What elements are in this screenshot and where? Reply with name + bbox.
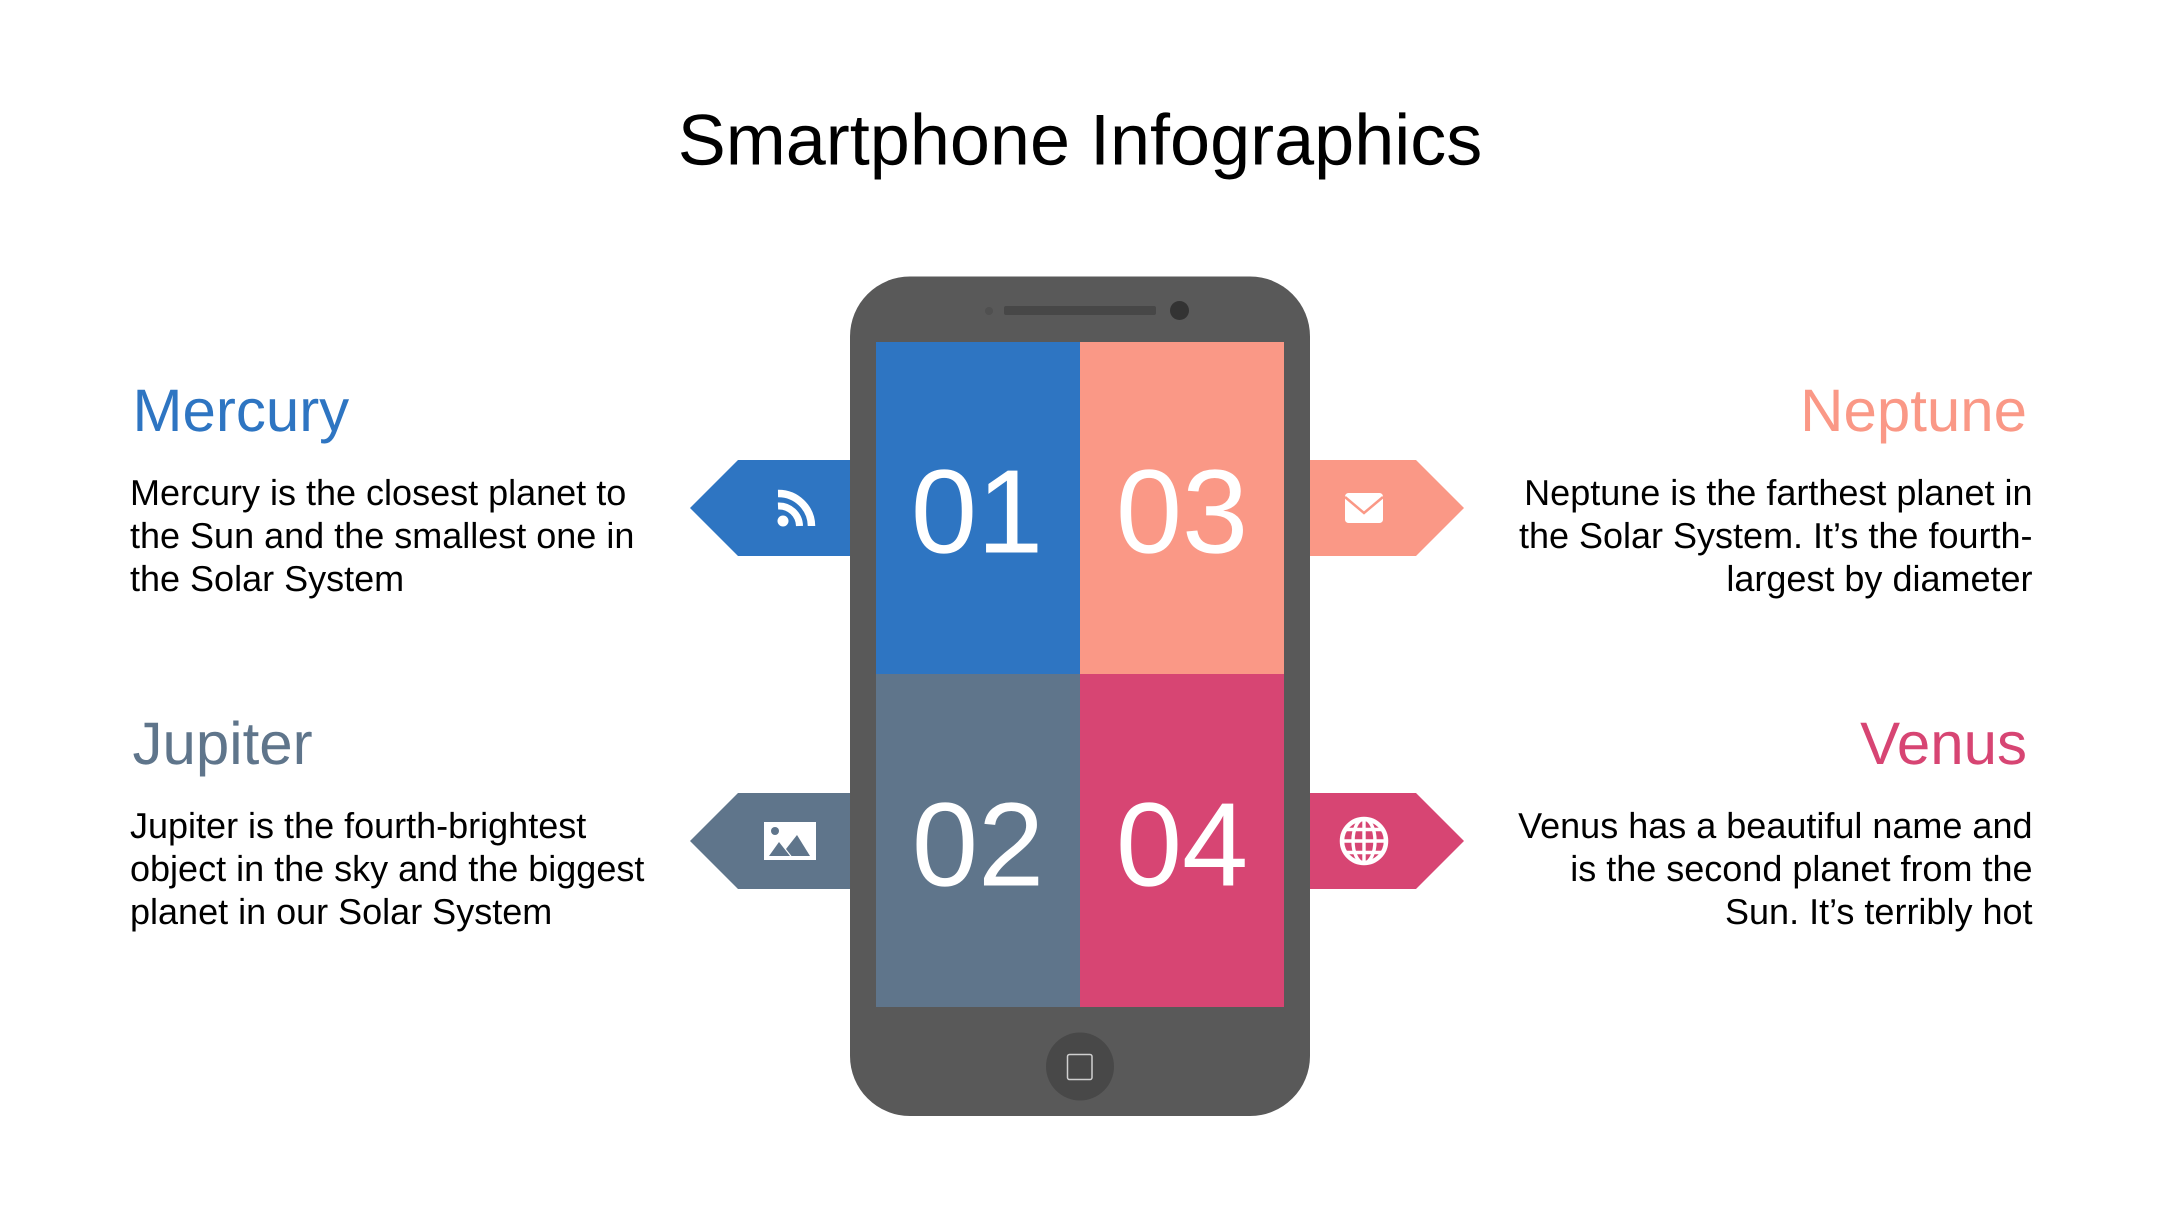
arrow tag: Neptune <box>1300 460 1464 556</box>
title: Smartphone Infographics <box>678 100 1482 180</box>
smartphone <box>850 276 1310 1116</box>
text block: Jupiter description: Jupiter is the fourth-brightest <box>130 805 586 846</box>
text block: Mercury description: Mercury is the closest planet to <box>130 472 626 513</box>
text block: Neptune description: Neptune is the farthest planet in <box>1524 472 2032 513</box>
text block: Jupiter description <box>130 805 644 932</box>
panel: 01 <box>876 342 1080 674</box>
panel: Mercury text <box>130 377 634 599</box>
panel: 03: 03 <box>1116 446 1248 578</box>
arrow tag: Venus <box>1300 793 1464 889</box>
sensor dot <box>985 307 993 315</box>
text block: Venus description <box>1518 805 2032 932</box>
text block: Venus description: Venus has a beautiful name and <box>1518 805 2032 846</box>
panel: 04: 04 <box>1116 778 1248 912</box>
text block: Mercury description <box>130 472 634 599</box>
icon: rss feed <box>778 493 812 526</box>
icon: globe <box>1342 819 1386 863</box>
heading: Venus: Venus <box>1860 710 2027 777</box>
text block: Neptune description: largest by diameter <box>1726 558 2033 599</box>
icon: picture <box>764 822 816 860</box>
arrow tag: Mercury <box>690 460 860 556</box>
heading: Mercury: Mercury <box>132 377 349 444</box>
camera <box>1170 301 1189 320</box>
text block: Venus description: is the second planet from the <box>1570 848 2032 889</box>
panel: Neptune text <box>1519 377 2033 599</box>
panel: 02: 02 <box>912 778 1044 912</box>
heading: Neptune: Neptune <box>1800 377 2027 444</box>
text block: Jupiter description: object in the sky and the biggest <box>130 848 644 889</box>
text block: Venus description: Sun. It’s terribly hot <box>1725 891 2032 932</box>
panel: Jupiter text <box>130 710 644 932</box>
panel: 01: 01 <box>911 446 1043 578</box>
arrow tag: Jupiter <box>690 793 860 889</box>
home button <box>1046 1032 1114 1100</box>
panel: 02 <box>876 674 1080 1007</box>
heading: Jupiter: Jupiter <box>132 710 313 777</box>
panel: Venus text <box>1518 710 2032 932</box>
text block: Jupiter description: planet in our Solar System <box>130 891 552 932</box>
panel: 04 <box>1080 674 1284 1007</box>
text block: Mercury description: the Solar System <box>130 558 404 599</box>
icon: envelope <box>1345 493 1383 523</box>
text block: Neptune description <box>1519 472 2033 599</box>
phone body <box>850 276 1310 1116</box>
speaker <box>1004 306 1156 315</box>
panel: 03 <box>1080 342 1284 674</box>
text block: Mercury description: the Sun and the smallest one in <box>130 515 634 556</box>
text block: Neptune description: the Solar System. It’s the fourth- <box>1519 515 2032 556</box>
